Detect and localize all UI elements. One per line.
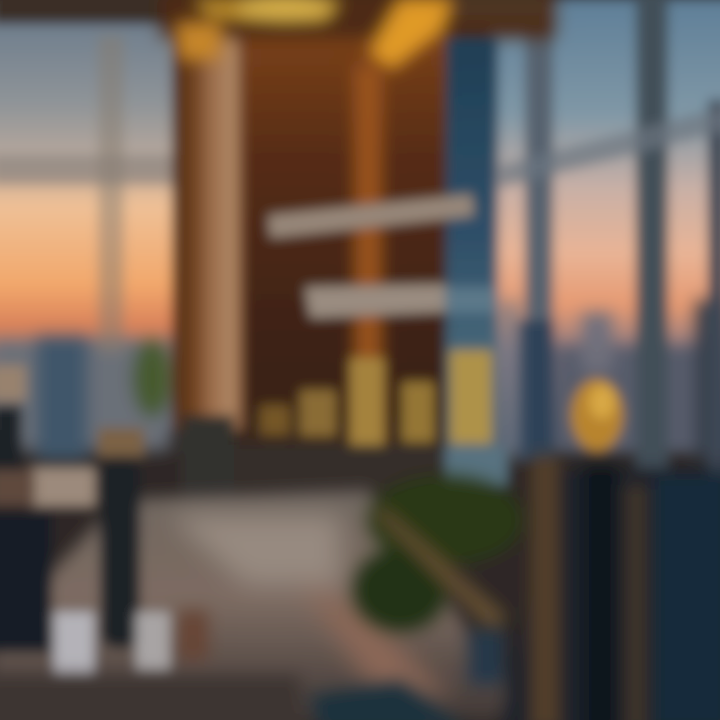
left table and lamps: [0, 365, 170, 674]
right window frame: [500, 0, 720, 480]
left window frame: [0, 0, 175, 355]
wall base shadow: [180, 415, 507, 500]
left window sky: [0, 0, 180, 430]
teal seat: [310, 630, 504, 720]
wood wall: [235, 20, 455, 490]
yellow lamp: [571, 379, 623, 451]
floor highlight: [170, 515, 450, 700]
glowing shelves: [268, 194, 495, 318]
right foreground chairs: [500, 455, 720, 720]
right city skyline: [555, 300, 720, 460]
amber wall strip: [354, 65, 382, 455]
tan column: [172, 30, 244, 430]
warm bar lights: [260, 350, 492, 446]
left city skyline: [0, 335, 172, 460]
blue column: [446, 38, 498, 483]
column shadow strip: [500, 300, 520, 460]
lower left floor shadow: [0, 610, 300, 720]
plant: [352, 475, 523, 635]
golden ceiling: [160, 0, 555, 70]
floor: [0, 490, 530, 720]
right window sky: [490, 0, 720, 450]
